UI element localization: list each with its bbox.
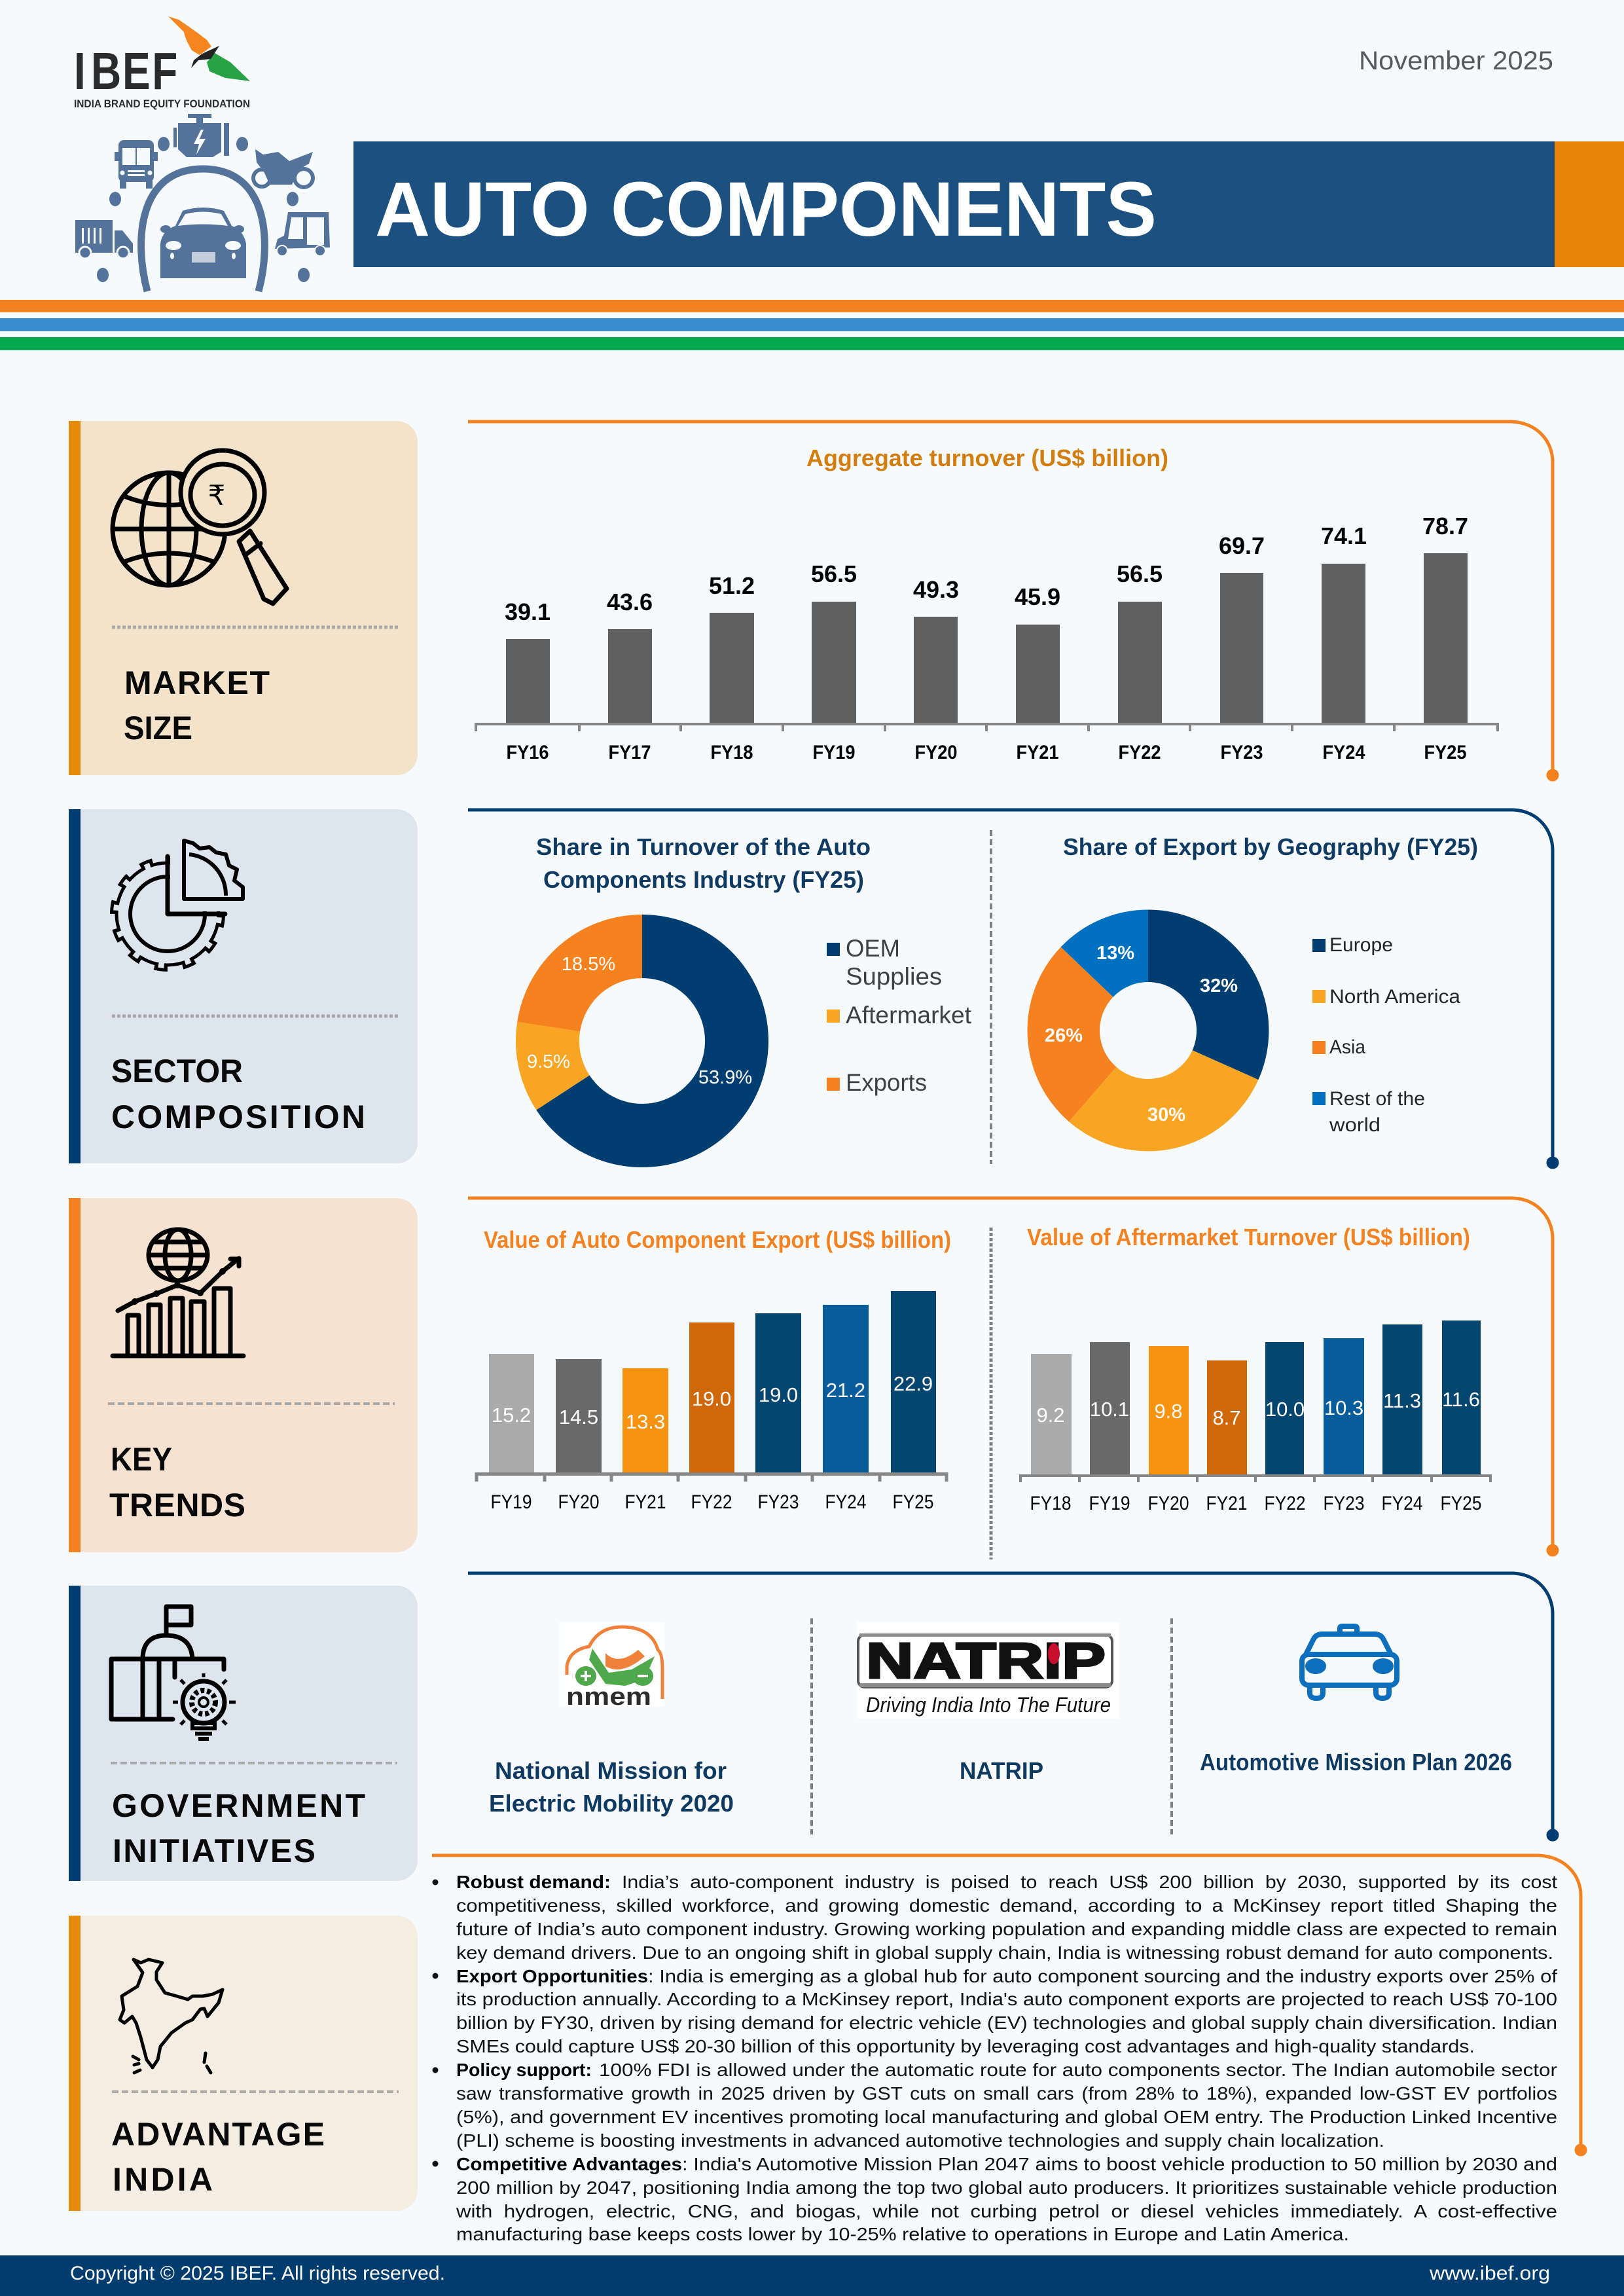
value labels: 69.7: [1219, 532, 1265, 559]
heading: sector composition: COMPOSITION: [111, 1099, 365, 1135]
bullet: export opportunities: billion by FY30, driven by rising demand for electric vehicle (EV) technologies and global supply chain diversification. Indian: [456, 2013, 1557, 2033]
panel: sector composition: [69, 809, 418, 1163]
donut slices: [1028, 910, 1269, 1151]
bullet: policy support: (PLI) scheme is boosting investments in advanced automotive technologies and supply chain localization.: [456, 2130, 1384, 2151]
chart title: Value of Aftermarket Turnover (US$ billion): [1027, 1224, 1470, 1250]
caption: Automotive Mission Plan 2026: [1200, 1749, 1512, 1776]
heading: key trends: TRENDS: [109, 1487, 245, 1523]
caption: NATRIP: [960, 1757, 1043, 1784]
icon: government building with bulb: [111, 1607, 236, 1739]
category labels: [491, 1491, 933, 1513]
panel: government initiatives: [69, 1586, 418, 1881]
text block: advantage india bullets: [432, 1872, 1557, 2244]
logo: IBEF: IBEF: [74, 42, 177, 101]
chart: value of auto component export: [477, 1226, 951, 1513]
heading: market size: SIZE: [124, 710, 192, 746]
chart title: Share of Export by Geography (FY25): [1063, 833, 1478, 860]
legend: [827, 935, 972, 1096]
donut labels: [527, 954, 752, 1088]
chart title: Aggregate turnover (US$ billion): [806, 445, 1168, 471]
legend: [1312, 934, 1460, 1136]
bullet: policy support: saw transformative growth in 2025 driven by GST cuts on small cars (from 28% to 18%), expanded low-GST EV portfolios: [456, 2083, 1557, 2104]
icon: gear with pie chart: [114, 841, 243, 968]
icon: globe with growth chart: [113, 1230, 244, 1356]
icon: globe with magnifier: [113, 450, 287, 604]
legend: Europe: [1329, 934, 1393, 956]
value labels: 13.3: [626, 1410, 665, 1433]
legend: world: [1329, 1114, 1380, 1136]
logo: NATRIP: Driving India Into The Future: [866, 1693, 1111, 1717]
category labels: FY22: [691, 1491, 732, 1513]
legend: Asia: [1329, 1036, 1365, 1058]
bracket: advantage india: [432, 1855, 1585, 2155]
footer: www.ibef.org: [1429, 2263, 1550, 2284]
donut labels: 9.5%: [527, 1051, 570, 1072]
category labels: FY24: [1381, 1493, 1423, 1514]
category labels: FY21: [1016, 742, 1059, 763]
donut labels: 13%: [1096, 943, 1134, 964]
icon: vehicles cluster: [75, 114, 330, 291]
chart: value of aftermarket turnover: [1020, 1224, 1490, 1514]
icon: car: [160, 208, 246, 278]
heading: advantage india: [111, 2116, 325, 2198]
category labels: FY21: [1206, 1493, 1248, 1514]
value labels: [505, 513, 1468, 625]
icon: rupee sign: ₹: [208, 479, 225, 511]
category labels: FY21: [624, 1491, 666, 1513]
category labels: [1030, 1493, 1482, 1514]
value labels: 11.3: [1383, 1389, 1421, 1412]
category labels: FY25: [1424, 742, 1466, 763]
caption: Electric Mobility 2020: [489, 1790, 734, 1817]
chart: share in turnover donut: [516, 833, 972, 1167]
heading: government initiatives: [112, 1787, 365, 1869]
icon: engine: [173, 114, 229, 157]
category labels: FY23: [758, 1491, 799, 1513]
value labels: 8.7: [1212, 1406, 1241, 1429]
bullet: robust demand: future of India’s auto component industry. Growing working population and expanding middle class are expected to remain: [456, 1919, 1557, 1939]
donut labels: 18.5%: [562, 954, 615, 975]
panel: advantage india: [69, 1916, 418, 2211]
bullet: robust demand: Robust demand:: [456, 1872, 611, 1892]
value labels: 14.5: [559, 1406, 598, 1429]
bullet: policy support: (5%), and government EV incentives promoting local manufacturing and global OEM entry. The Production Linked Incentive: [456, 2107, 1557, 2127]
bullet: robust demand: India’s auto-component industry is poised to reach US$ 200 billion by 2030, supported by its cost: [622, 1872, 1557, 1892]
value labels: 10.0: [1265, 1398, 1305, 1421]
category labels: FY18: [1030, 1493, 1071, 1514]
icon: motorcycle: [253, 149, 313, 187]
donut labels: [1045, 943, 1238, 1125]
initiative: automotive mission plan: [1200, 1626, 1512, 1776]
bullet: robust demand: [432, 1872, 1557, 1963]
category labels: FY20: [558, 1491, 600, 1513]
logo: NMEM: [559, 1622, 664, 1711]
legend: Rest of the: [1329, 1088, 1425, 1110]
legend: North America: [1329, 986, 1460, 1008]
caption: National Mission for: [495, 1757, 727, 1784]
panel: market size: [69, 421, 418, 775]
caption: [489, 1757, 734, 1817]
chart title: Share in Turnover of the Auto: [536, 833, 871, 860]
heading: sector composition: SECTOR: [111, 1053, 243, 1089]
value labels: 21.2: [826, 1379, 865, 1402]
donut labels: 32%: [1200, 975, 1238, 996]
heading: government initiatives: GOVERNMENT: [112, 1787, 365, 1824]
category labels: FY24: [825, 1491, 867, 1513]
icon: car: [1302, 1626, 1397, 1698]
bracket: government initiatives: [468, 1573, 1557, 1840]
heading: key trends: [109, 1441, 245, 1523]
title banner: AUTO COMPONENTS: [375, 166, 1157, 253]
bullet: competitive advantages: : India's Automotive Mission Plan 2047 aims to boost vehicle production to 50 million by 2030 and: [682, 2154, 1557, 2174]
bullet: policy support: [432, 2060, 1557, 2151]
panel: key trends: [69, 1198, 418, 1552]
icon: bus: [115, 140, 158, 189]
value labels: 19.0: [759, 1383, 798, 1406]
bullet: robust demand: key demand drivers. Due to an ongoing shift in global supply chain, India is witnessing robust demand for auto components.: [456, 1942, 1553, 1963]
value labels: 78.7: [1422, 513, 1468, 539]
value labels: 51.2: [709, 572, 755, 599]
bullet: competitive advantages: manufacturing base keeps costs lower by 10-25% relative to operations in Europe and Latin America.: [456, 2224, 1349, 2244]
bullet: competitive advantages: 200 million by 2047, positioning India among the top two global auto producers. It prioritizes sustainable vehicle production: [456, 2178, 1557, 2198]
category labels: FY16: [507, 742, 549, 763]
category labels: FY23: [1324, 1493, 1364, 1514]
logo: NATRIP: NATRIP: [866, 1633, 1106, 1689]
category labels: FY17: [609, 742, 651, 763]
value labels: 22.9: [893, 1372, 933, 1395]
value labels: 9.2: [1036, 1404, 1065, 1427]
bullet: competitive advantages: [432, 2154, 1557, 2244]
category labels: FY19: [1089, 1493, 1130, 1514]
bullet: export opportunities: SMEs could capture US$ 20-30 billion of this opportunity by leveraging cost advantages and high-quality standards.: [456, 2036, 1475, 2056]
bullet: export opportunities: : India is emerging as a global hub for auto component sourcing and the industry exports over 25% of: [648, 1966, 1557, 1986]
logo: NMEM: nmem: [566, 1683, 651, 1711]
heading: market size: [124, 665, 270, 746]
value labels: 74.1: [1321, 522, 1367, 549]
heading: advantage india: INDIA: [113, 2161, 213, 2198]
date: November 2025: [1359, 46, 1553, 75]
chart title: Components Industry (FY25): [543, 866, 864, 893]
category labels: FY19: [813, 742, 855, 763]
value labels: 43.6: [607, 589, 653, 615]
footer: [0, 2255, 1624, 2296]
value labels: 11.6: [1442, 1388, 1480, 1411]
value labels: 39.1: [505, 598, 550, 625]
value labels: 56.5: [1117, 560, 1163, 587]
bullet: export opportunities: [432, 1966, 1557, 2056]
chart: export by geography donut: [1028, 833, 1478, 1151]
value labels: [492, 1372, 933, 1433]
category labels: FY25: [893, 1491, 933, 1513]
title banner: [353, 141, 1624, 267]
footer: Copyright © 2025 IBEF. All rights reserved.: [70, 2263, 445, 2284]
axis: [476, 724, 1498, 731]
heading: government initiatives: INITIATIVES: [113, 1832, 316, 1869]
category labels: FY20: [915, 742, 957, 763]
bars: [506, 553, 1468, 723]
bullet: export opportunities: its production annually. According to a McKinsey report, India's auto component exports are projected to reach US$ 70-100: [456, 1989, 1557, 2009]
chart title: Value of Auto Component Export (US$ billion): [484, 1226, 951, 1253]
category labels: FY22: [1118, 742, 1161, 763]
logo: NATRIP: [857, 1622, 1119, 1719]
value labels: 56.5: [811, 560, 857, 587]
bracket: sector composition: [468, 810, 1557, 1167]
category labels: [507, 742, 1466, 763]
bullet: robust demand: competitiveness, skilled workforce, and growing domestic demand, according to a McKinsey report titled Shaping the: [456, 1895, 1557, 1916]
icon: auto rickshaw: [275, 212, 330, 256]
value labels: [1036, 1388, 1480, 1429]
icon: arch: [141, 169, 264, 291]
bracket: key trends: [468, 1198, 1557, 1555]
category labels: FY22: [1265, 1493, 1305, 1514]
bracket: market size: [468, 422, 1557, 780]
value labels: 49.3: [913, 576, 959, 603]
logo: IBEF: [74, 16, 250, 110]
donut labels: 26%: [1045, 1025, 1083, 1046]
chart title: [536, 833, 871, 893]
legend: Supplies: [846, 963, 942, 990]
icon: decorative dots: [97, 137, 310, 282]
value labels: 10.3: [1324, 1396, 1363, 1419]
category labels: FY20: [1148, 1493, 1189, 1514]
legend: Exports: [846, 1069, 927, 1096]
logo: IBEF: INDIA BRAND EQUITY FOUNDATION: [74, 98, 250, 110]
bullet: policy support: 100% FDI is allowed under the automatic route for auto components sector. The Indian automobile sector: [599, 2060, 1557, 2080]
bullet: competitive advantages: Competitive Advantages: [456, 2154, 682, 2174]
category labels: FY24: [1322, 742, 1365, 763]
value labels: 45.9: [1015, 583, 1060, 610]
value labels: 19.0: [692, 1387, 731, 1410]
tricolour stripes: [0, 300, 1624, 350]
legend: Aftermarket: [846, 1002, 972, 1029]
category labels: FY18: [711, 742, 753, 763]
donut slices: [516, 915, 768, 1167]
bullet: export opportunities: Export Opportunities: [456, 1966, 648, 1986]
value labels: 10.1: [1090, 1398, 1129, 1421]
bars: [1031, 1321, 1481, 1474]
category labels: FY23: [1220, 742, 1263, 763]
donut labels: 30%: [1147, 1104, 1185, 1125]
initiative: NATRIP: [857, 1622, 1119, 1784]
heading: sector composition: [111, 1053, 365, 1135]
heading: market size: MARKET: [124, 665, 270, 701]
icon: india map: [120, 1959, 223, 2073]
category labels: FY19: [491, 1491, 532, 1513]
initiative: NMEM: [489, 1622, 734, 1817]
axis: [477, 1474, 947, 1482]
heading: advantage india: ADVANTAGE: [111, 2116, 325, 2153]
icon: truck: [75, 220, 133, 259]
bars: [489, 1291, 936, 1472]
donut labels: 53.9%: [698, 1067, 752, 1088]
legend: OEM: [846, 935, 900, 962]
value labels: 9.8: [1154, 1400, 1183, 1423]
heading: key trends: KEY: [111, 1441, 172, 1478]
bullet: competitive advantages: with hydrogen, electric, CNG, and biogas, while not curbing petrol or diesel vehicles immediately. A cost-effective: [456, 2201, 1557, 2221]
chart: aggregate turnover: [476, 445, 1498, 763]
bullet: policy support: Policy support:: [456, 2060, 592, 2080]
axis: [1020, 1476, 1490, 1482]
value labels: 15.2: [492, 1404, 531, 1427]
category labels: FY25: [1440, 1493, 1482, 1514]
